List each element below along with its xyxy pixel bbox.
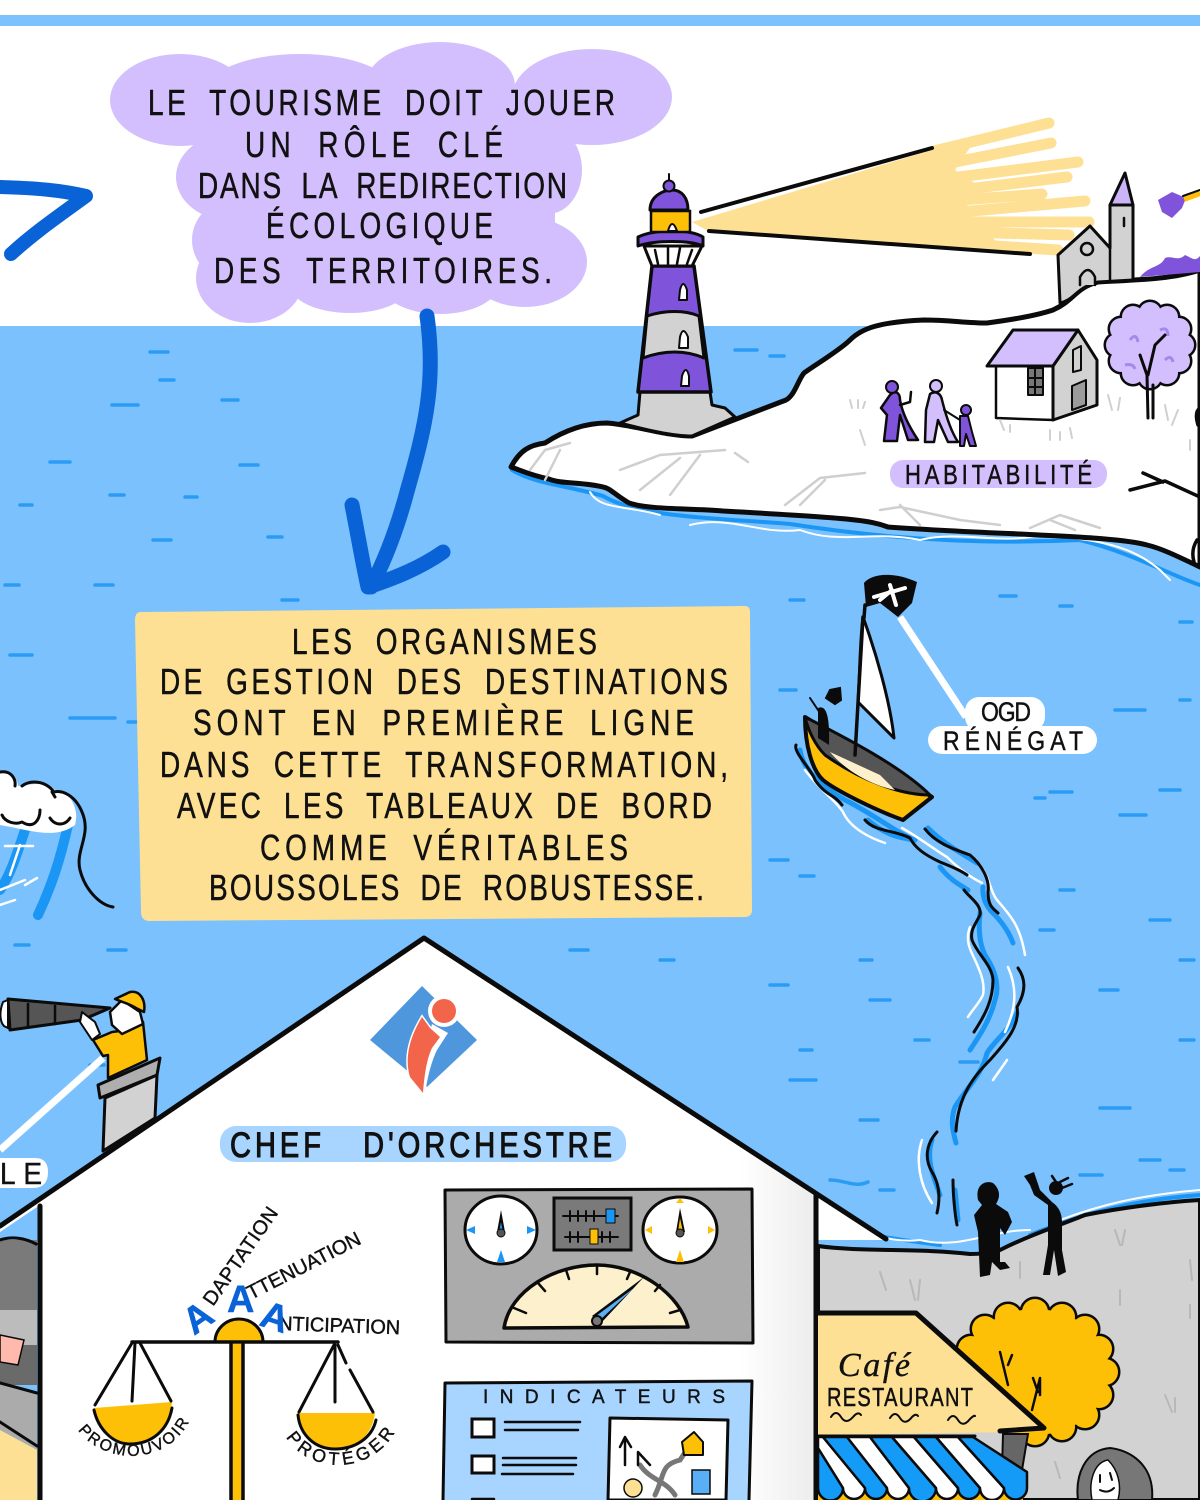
wall — [996, 366, 1053, 420]
map drawing — [620, 1432, 710, 1497]
cloud shape — [110, 42, 672, 323]
branch at the right edge — [1130, 408, 1200, 562]
cloud text: LE TOURISME DOIT JOUER — [148, 82, 615, 123]
beam rays — [930, 123, 1089, 250]
café sign — [818, 1313, 1045, 1436]
tower — [638, 266, 711, 392]
right pan — [298, 1413, 375, 1448]
sea background — [0, 326, 1200, 1500]
beam outlines — [701, 148, 1030, 254]
hand — [80, 1012, 100, 1040]
indicators board: INDICATEURS — [483, 1387, 725, 1408]
callout line: lookout — [0, 1058, 103, 1150]
balance scale: PROTÉGER — [286, 1428, 395, 1465]
door — [1072, 380, 1086, 410]
left side figure — [0, 1238, 37, 1500]
slider panel — [554, 1198, 631, 1250]
hat — [115, 992, 144, 1012]
map card — [608, 1418, 728, 1500]
house on the hill — [987, 330, 1097, 420]
grass tufts — [850, 395, 1190, 450]
cloud text: DANS LA REDIRECTION — [198, 165, 567, 206]
deck — [805, 717, 930, 795]
lookout post — [103, 1075, 157, 1151]
windows — [679, 284, 689, 386]
box text: DANS CETTE TRANSFORMATION, — [160, 744, 728, 785]
wall shade — [740, 1144, 816, 1500]
skull mark — [874, 585, 905, 605]
label: OGD rénégat: RÉNÉGAT — [943, 728, 1083, 756]
dome — [650, 190, 688, 210]
black wake — [796, 745, 1024, 1225]
dome and pole — [215, 1319, 263, 1342]
gallery — [644, 246, 702, 266]
box text: BOUSSOLES DE ROBUSTESSE. — [209, 867, 704, 908]
indicators board — [443, 1381, 752, 1500]
box text — [160, 621, 728, 908]
AAA words: DAPTATION — [199, 1203, 283, 1310]
café text — [827, 1347, 975, 1424]
coat — [93, 1022, 147, 1078]
flag — [864, 575, 917, 617]
panel — [445, 1189, 753, 1343]
large dial — [504, 1265, 688, 1328]
hull — [805, 717, 932, 820]
side wall — [1053, 330, 1097, 420]
box text: LES ORGANISMES — [292, 621, 597, 662]
arrow: cloud to yellow box — [352, 316, 443, 587]
wake of the boat — [796, 745, 1025, 1225]
person left — [974, 1182, 1012, 1277]
arrow: from the left — [0, 187, 86, 254]
awning stripes — [818, 1437, 1027, 1500]
box text: COMME VÉRITABLES — [260, 827, 628, 868]
gable and wall — [0, 938, 888, 1500]
cloud text: DES TERRITOIRES. — [214, 250, 552, 291]
café text: RESTAURANT — [827, 1382, 973, 1412]
label: chef d'orchestre: CHEF D'ORCHESTRE — [230, 1125, 612, 1165]
breaking wave — [0, 772, 113, 915]
telescope — [8, 999, 110, 1030]
head — [110, 1000, 143, 1034]
window — [1028, 368, 1043, 395]
left gauge — [465, 1196, 537, 1264]
AAA words: TTENUATION — [243, 1228, 365, 1304]
grass marks — [880, 1230, 1192, 1478]
label: OGD rénégat: OGD — [981, 699, 1031, 727]
cloud text: ÉCOLOGIQUE — [266, 205, 493, 246]
woman in the corner — [1077, 1448, 1152, 1500]
lookout with telescope — [0, 992, 160, 1151]
coastline water — [818, 1195, 1200, 1245]
yellow text box — [135, 606, 752, 921]
shore water — [512, 470, 1200, 585]
sail — [858, 617, 894, 738]
balance scale: PROMOUVOIR — [78, 1418, 190, 1456]
yellow tree — [952, 1299, 1118, 1470]
checklist — [472, 1419, 580, 1499]
pan labels — [78, 1420, 190, 1456]
beam body — [692, 140, 1030, 256]
label: habitabilité: HABITABILITÉ — [905, 459, 1092, 491]
balance scale — [78, 1318, 395, 1500]
lighthouse — [620, 174, 735, 436]
label fragment: LE: LE — [0, 1157, 42, 1191]
grey ground — [818, 1200, 1200, 1500]
sea ripples — [5, 350, 1194, 1190]
logo — [370, 986, 477, 1093]
AAA words: A — [175, 1293, 222, 1343]
roof lines — [0, 938, 886, 1239]
purple tree — [1106, 302, 1194, 418]
box text: SONT EN PREMIÈRE LIGNE — [193, 702, 694, 743]
right gauge — [643, 1197, 717, 1263]
blue wake — [800, 750, 1017, 1220]
dashboard — [445, 1189, 753, 1343]
hill — [511, 270, 1200, 567]
cliff marks — [530, 443, 1100, 530]
grey band — [643, 312, 704, 358]
pirate — [818, 707, 829, 745]
cloud text — [148, 82, 615, 291]
awning — [818, 1437, 1027, 1500]
box text: AVEC LES TABLEAUX DE BORD — [177, 785, 712, 826]
pirate boat — [805, 575, 932, 820]
AAA words: A — [227, 1279, 254, 1321]
main house — [0, 938, 888, 1500]
AAA words: NTICIPATION — [278, 1313, 401, 1339]
label: OGD rénégat — [928, 697, 1097, 756]
café text: Café — [838, 1347, 912, 1384]
callout line: OGD — [900, 617, 966, 717]
speech cloud: tourism message — [110, 42, 672, 323]
AAA words — [175, 1203, 401, 1343]
white wake — [805, 770, 1025, 1203]
family of three — [881, 380, 976, 446]
roof — [987, 330, 1078, 366]
light beam — [692, 123, 1089, 256]
AAA words: A — [255, 1294, 294, 1342]
people on the shore — [818, 1172, 1200, 1500]
left pan — [94, 1402, 172, 1443]
top bar — [0, 15, 1200, 26]
land with coast — [511, 270, 1200, 585]
cloud text: UN RÔLE CLÉ — [245, 123, 503, 165]
church — [1058, 173, 1133, 303]
box text: DE GESTION DES DESTINATIONS — [160, 661, 728, 702]
purple bush and feather — [1140, 190, 1200, 277]
base — [620, 392, 735, 436]
lantern — [651, 211, 690, 232]
mast — [855, 605, 865, 755]
person right — [1024, 1172, 1066, 1276]
